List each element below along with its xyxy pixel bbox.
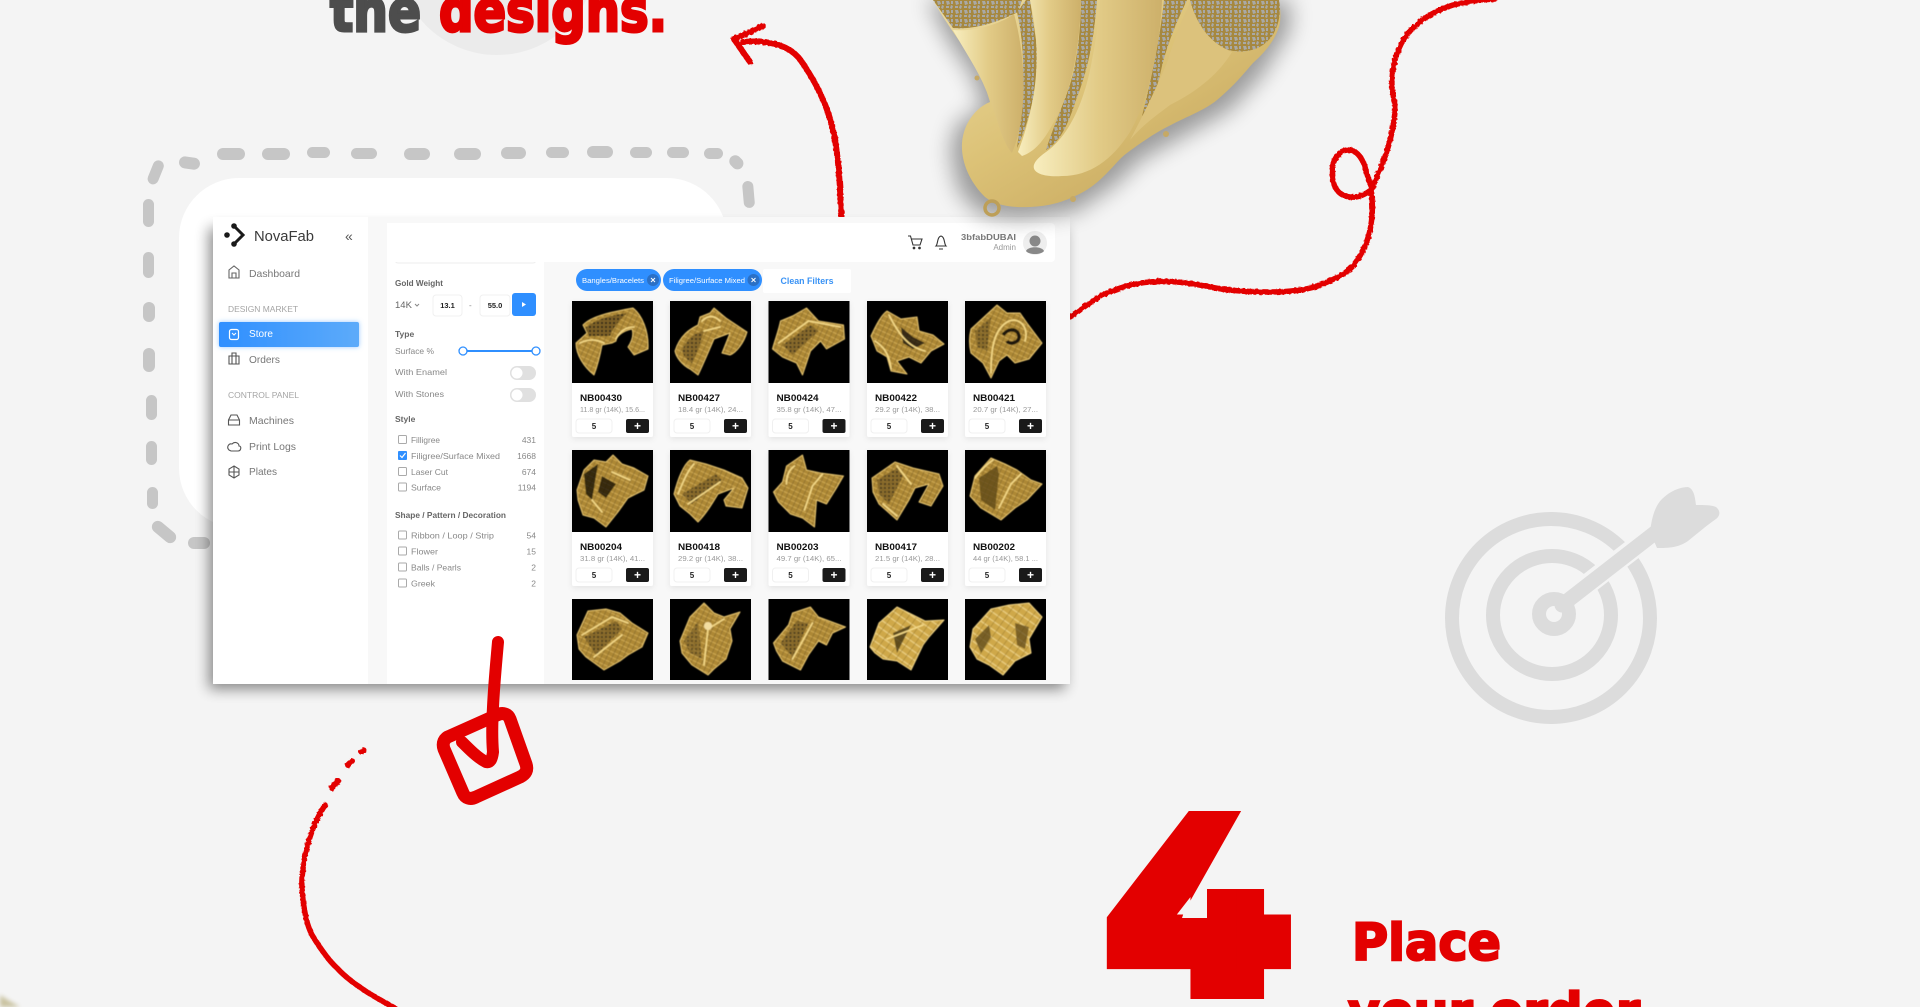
- filter: style: Surface: [411, 482, 441, 492]
- filter: shape pattern decoration: Greek: [411, 578, 436, 588]
- target rings: [1452, 519, 1650, 717]
- thumbnail 13: [768, 599, 850, 680]
- card NB00204: [572, 450, 653, 586]
- card NB00204: 31.8 gr (14K), 41...: [580, 554, 645, 563]
- gold corner fragment bottom left: [0, 995, 20, 1007]
- thumbnail 12: [670, 599, 751, 680]
- filter: shape pattern decoration: Shape / Pattern / Decoration: [395, 510, 506, 520]
- pendant body: [933, 0, 1280, 207]
- card NB00422: 5: [887, 422, 892, 431]
- top header bar: [387, 223, 1055, 262]
- thumbnail 11: [572, 599, 653, 680]
- card NB00202: NB00202: [973, 542, 1015, 553]
- card NB00427: 18.4 gr (14K), 24...: [678, 405, 743, 414]
- filter: type: [395, 329, 540, 402]
- user name: 3bfabDUBAI: [961, 232, 1016, 242]
- filter: shape pattern decoration: 2: [531, 562, 536, 572]
- filter: gold weight: [395, 278, 536, 316]
- decorative grey circle behind heading: [397, 0, 597, 55]
- section label: control panel: CONTROL PANEL: [228, 390, 299, 400]
- card NB00424: 5: [788, 422, 793, 431]
- card NB00422: NB00422: [875, 393, 917, 404]
- nav: machines: [228, 415, 294, 427]
- card NB00417: 21.5 gr (14K), 28...: [875, 554, 940, 563]
- card NB00427: 5: [690, 422, 695, 431]
- card NB00421: 5: [985, 422, 990, 431]
- card NB00427: NB00427: [678, 393, 720, 404]
- product grid: [572, 301, 1046, 680]
- target and arrow icon: [1452, 487, 1719, 717]
- filter: style: Filigree/Surface Mixed: [411, 451, 500, 461]
- pendant shadow: [928, 0, 1290, 220]
- card NB00418: 5: [690, 571, 695, 580]
- card NB00422: +: [929, 419, 936, 433]
- filter: shape pattern decoration: [395, 510, 536, 588]
- card NB00421: 20.7 gr (14K), 27...: [973, 405, 1038, 414]
- filter: shape pattern decoration: Balls / Pearls: [411, 562, 461, 572]
- step title: place your order: [1348, 914, 1640, 1007]
- card NB00204: 5: [592, 571, 597, 580]
- pendant polished bands: [953, 0, 1232, 176]
- card NB00427: [670, 301, 751, 437]
- filter: style: 431: [522, 435, 536, 445]
- filter: type: With Enamel: [395, 367, 447, 377]
- NovaFab logo icon: [224, 223, 243, 247]
- card NB00430: +: [634, 419, 641, 433]
- card NB00417: [867, 450, 948, 586]
- card NB00422: 29.2 gr (14K), 38...: [875, 405, 940, 414]
- card NB00421: +: [1027, 419, 1034, 433]
- nav: dashboard: Dashboard: [249, 268, 300, 280]
- button: clean filters: Clean Filters: [780, 276, 834, 286]
- background notch shaping the open top of the 4: [1182, 790, 1340, 918]
- filter: style: 1668: [517, 451, 536, 461]
- pendant loop ring: [985, 201, 999, 215]
- dashed grey outline around the app: [143, 146, 755, 549]
- filter: shape pattern decoration: Flower: [411, 546, 438, 556]
- card NB00427: +: [732, 419, 739, 433]
- section label: design market: DESIGN MARKET: [228, 304, 298, 314]
- filter: style: Filligree: [411, 435, 440, 445]
- card NB00417: 5: [887, 571, 892, 580]
- red dotted curve bottom left: [302, 750, 396, 1007]
- target arrow shaft: [1575, 532, 1655, 594]
- chip: filigree surface mixed: [663, 269, 762, 291]
- nav: plates: Plates: [249, 466, 277, 478]
- filter: type: Surface %: [395, 346, 434, 356]
- card NB00203: NB00203: [776, 542, 818, 553]
- nav: store active: [219, 322, 359, 347]
- card NB00202: 5: [985, 571, 990, 580]
- gold filigree pendant: [928, 0, 1290, 220]
- icon: cart: [908, 236, 922, 249]
- card NB00424: +: [830, 419, 838, 433]
- card NB00421: [965, 301, 1046, 437]
- filter: gold weight: 55.0: [488, 301, 502, 310]
- filter: style: 674: [522, 467, 536, 477]
- card NB00418: [670, 450, 751, 586]
- third row of jewellery thumbnails: [572, 599, 1046, 680]
- nav: orders: Orders: [249, 354, 280, 366]
- card NB00202: +: [1027, 568, 1034, 582]
- thumbnail 14: [867, 599, 948, 680]
- filter: gold weight: -: [469, 301, 472, 310]
- filter: shape pattern decoration: 2: [531, 578, 536, 588]
- chip: bangles bracelets: Bangles/Bracelets: [582, 278, 645, 285]
- button: clean filters: [763, 269, 851, 293]
- app shadow: [209, 228, 1065, 689]
- app background: [213, 217, 1070, 684]
- pendant nubs: [974, 76, 1169, 202]
- nav: dashboard: [229, 266, 300, 280]
- heading: the designs: [330, 0, 667, 45]
- red hand-drawn checkbox icon: [443, 642, 527, 798]
- sidebar panel: [213, 217, 368, 684]
- filter column panel: [387, 223, 544, 684]
- card NB00424: NB00424: [776, 393, 819, 404]
- card NB00203: 5: [788, 571, 793, 580]
- check mark with long stem: [462, 642, 498, 762]
- nav: store active: Store: [249, 328, 273, 340]
- card NB00430: NB00430: [580, 393, 622, 404]
- checkbox outline: [443, 714, 527, 798]
- filter: style: [395, 414, 536, 492]
- white rounded panel behind the app: [179, 178, 727, 528]
- active filter chips: [576, 269, 851, 293]
- nav: orders: [229, 353, 280, 366]
- chip: filigree surface mixed: Filigree/Surface Mixed: [669, 278, 745, 285]
- card NB00418: NB00418: [678, 542, 720, 553]
- nav: machines: Machines: [249, 415, 294, 427]
- filter: style: Laser Cut: [411, 467, 449, 477]
- card NB00202: 44 gr (14K), 58.1 ...: [973, 554, 1038, 563]
- card NB00203: 49.7 gr (14K), 65...: [776, 554, 842, 563]
- red thread from app to top right with loop: [1070, 0, 1495, 317]
- filter: gold weight: 13.1: [440, 301, 455, 310]
- nav: print logs: Print Logs: [249, 441, 296, 453]
- card NB00424: 35.8 gr (14K), 47...: [776, 405, 842, 414]
- card NB00204: +: [634, 568, 641, 582]
- card NB00203: +: [830, 568, 838, 582]
- card NB00430: [572, 301, 653, 437]
- title line 1: Place: [1352, 914, 1501, 973]
- nav: print logs: [228, 441, 296, 453]
- card NB00430: 11.8 gr (14K), 15.6...: [580, 405, 645, 414]
- card NB00424: [768, 301, 850, 437]
- filter: shape pattern decoration: Ribbon / Loop / Strip: [411, 530, 494, 540]
- card NB00204: NB00204: [580, 542, 623, 553]
- card NB00418: +: [732, 568, 739, 582]
- filter: gold weight: Gold Weight: [395, 278, 443, 288]
- filter: shape pattern decoration: 54: [527, 530, 536, 540]
- card NB00430: 5: [592, 422, 597, 431]
- target arrow fletching: [1650, 487, 1719, 548]
- card NB00202: [965, 450, 1046, 586]
- filter: shape pattern decoration: 15: [527, 546, 536, 556]
- nav: plates: [229, 466, 277, 478]
- filter: type: With Stones: [395, 389, 444, 399]
- user avatar: [1023, 231, 1047, 255]
- collapse chevrons: «: [345, 228, 353, 244]
- card NB00418: 29.2 gr (14K), 38...: [678, 554, 743, 563]
- filter: type: Type: [395, 329, 414, 339]
- pendant filigree openings: [933, 0, 1280, 150]
- filter: style: 1194: [518, 482, 536, 492]
- red curved arrow pointing to heading: [734, 26, 842, 225]
- card NB00421: NB00421: [973, 393, 1016, 404]
- card NB00417: NB00417: [875, 542, 917, 553]
- chip: bangles bracelets: [576, 269, 661, 291]
- filter: gold weight: 14K: [395, 300, 413, 311]
- NovaFab wordmark: NovaFab: [254, 228, 314, 245]
- card NB00417: +: [929, 568, 936, 582]
- filter: style: Style: [395, 414, 416, 424]
- thumbnail 15: [965, 599, 1046, 680]
- user role: Admin: [993, 243, 1016, 252]
- card NB00422: [867, 301, 948, 437]
- icon: bell: [936, 236, 946, 249]
- app screenshot window: [209, 217, 1070, 689]
- card NB00203: [768, 450, 850, 586]
